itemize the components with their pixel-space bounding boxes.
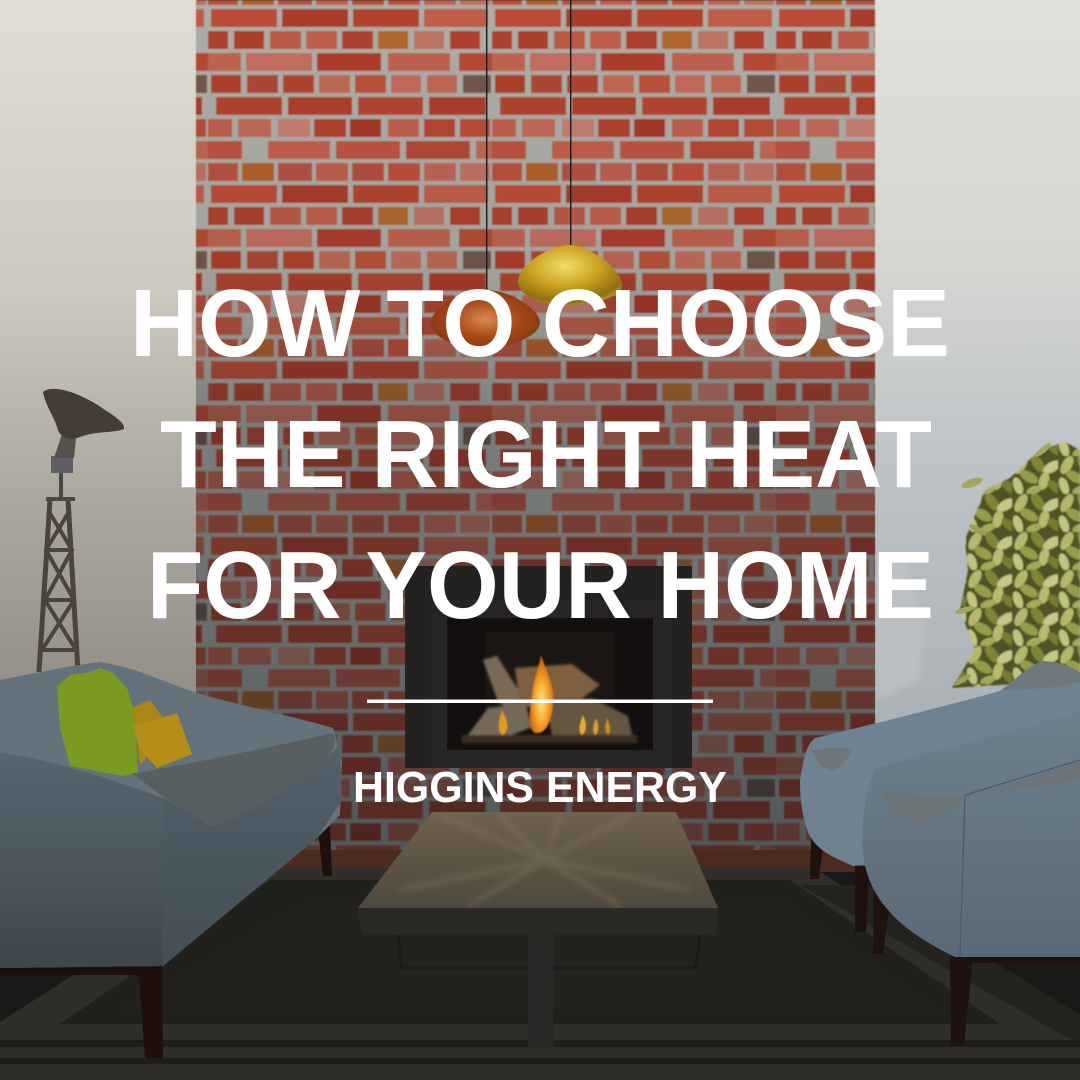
divider rule (367, 700, 713, 703)
lamp tower (39, 499, 78, 672)
floor lamp (39, 389, 124, 672)
front armchair seat patch (880, 760, 1080, 826)
yellow back pillow (133, 700, 162, 765)
floor and rug (0, 850, 1080, 1080)
plant (952, 441, 1080, 688)
left wall (0, 0, 197, 720)
lamp bracket (51, 456, 73, 473)
brand name: HIGGINS ENERGY (353, 763, 727, 812)
sofa right side (163, 745, 342, 966)
copper pendant light (431, 290, 540, 348)
sofa front arm (0, 752, 163, 968)
sofa seat (133, 733, 335, 827)
sofa back (0, 662, 342, 968)
title line 2: THE RIGHT HEAT (160, 401, 932, 508)
flames (499, 655, 610, 735)
title line 1: HOW TO CHOOSE (130, 270, 950, 377)
lamp horn shade (43, 389, 124, 439)
coffee table (358, 812, 718, 1048)
chair legs (810, 834, 973, 1046)
left sofa (0, 662, 342, 1058)
fireplace surround (405, 566, 692, 768)
right armchairs (800, 661, 1080, 1046)
title line 3: FOR YOUR HOME (147, 532, 934, 639)
gold pendant light (518, 245, 622, 305)
green pillow (57, 668, 138, 776)
logs (462, 656, 637, 743)
front armchair (862, 712, 1080, 958)
back armchair (800, 661, 1080, 866)
headrest cushion (1003, 661, 1080, 690)
back armchair seat patch (812, 748, 852, 770)
firebox (447, 618, 653, 750)
sofa legs (0, 826, 332, 1058)
title (130, 270, 950, 639)
brick chimney wall (196, 0, 875, 860)
pendant cords (486, 0, 571, 296)
yellow front pillow (133, 713, 192, 768)
right wall (874, 0, 1080, 760)
fireplace (405, 566, 692, 768)
